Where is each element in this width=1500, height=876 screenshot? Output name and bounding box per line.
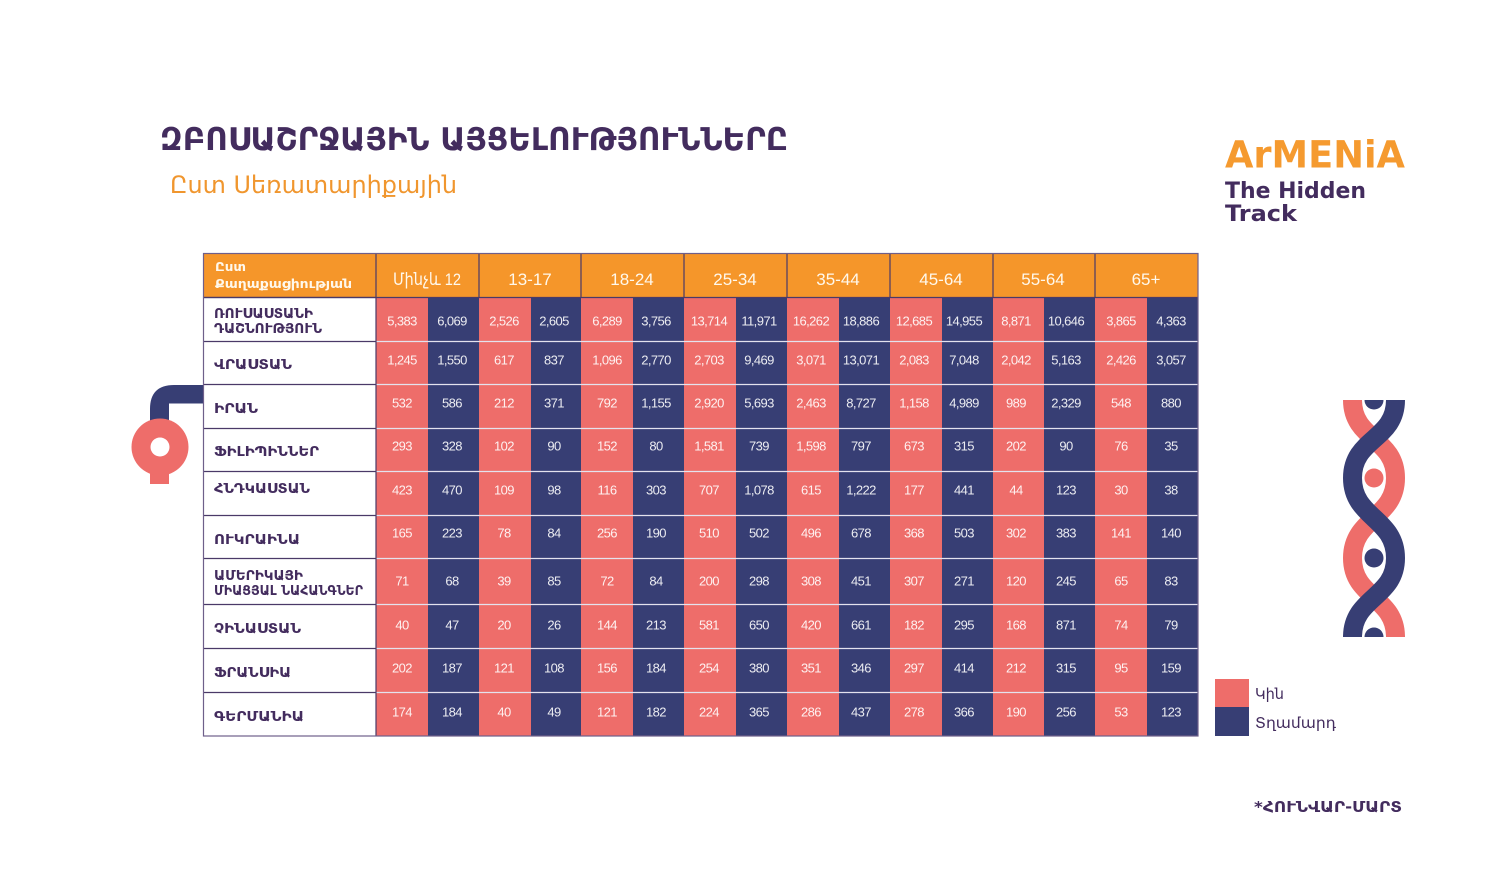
logo: Armenia The Hidden Track: Track (1225, 202, 1298, 227)
row: Georgia: 9,469 (744, 352, 774, 368)
row: Russian Federation: 11,971 (741, 314, 777, 328)
table header row: Ըստ (215, 260, 246, 274)
row: United States: ՄԻԱՑՅԱԼ ՆԱՀԱՆԳՆԵՐ (214, 583, 363, 599)
row: Germany: 366 (954, 704, 974, 720)
row: Philippines: 76 (1114, 438, 1128, 454)
row: Germany: 40 (497, 704, 511, 720)
row: India: 1,078 (744, 482, 774, 498)
title: ԶԲՈՍԱՇՐՋԱՅԻՆ ԱՅՑԵԼՈՒԹՅՈՒՆՆԵՐԸ (160, 122, 788, 158)
row: Georgia: 617 (494, 352, 514, 368)
row: Georgia: 2,426 (1106, 352, 1136, 368)
row: Georgia: 3,057 (1156, 352, 1186, 368)
row: France: 95 (1114, 660, 1128, 676)
row: China (214, 618, 1178, 637)
row: Iran: 880 (1161, 396, 1181, 410)
legend (1215, 679, 1336, 736)
row: Russian Federation: 2,526 (489, 314, 519, 328)
row: Ukraine: 84 (547, 526, 561, 540)
row: Philippines (214, 438, 1178, 460)
row: United States: 307 (904, 574, 924, 588)
row: Iran: 2,463 (796, 396, 826, 410)
row: United States: 120 (1006, 574, 1026, 588)
row: India: 98 (547, 482, 561, 498)
row: Georgia (214, 352, 1186, 373)
row: India: 615 (801, 482, 821, 498)
row: Philippines: 202 (1006, 438, 1026, 454)
row: France: 187 (442, 660, 462, 676)
row: Georgia: 13,071 (843, 352, 879, 368)
row: Iran: 989 (1006, 396, 1026, 410)
row: Iran: 548 (1111, 396, 1131, 410)
row: Georgia: 2,703 (694, 352, 724, 368)
row: United States: 245 (1056, 574, 1076, 588)
row: Russian Federation: 6,069 (437, 314, 467, 328)
row: India: 44 (1009, 482, 1023, 498)
row: Russian Federation: 10,646 (1048, 314, 1084, 328)
row: Iran: 2,329 (1051, 396, 1081, 410)
table header row: 35-44 (816, 270, 860, 289)
female and male data columns (376, 297, 1198, 736)
row: Russian Federation: ՌՈՒՍԱՍՏԱՆԻ (214, 306, 313, 322)
row: France: 380 (749, 660, 769, 676)
row: India (214, 481, 1178, 498)
row: Russian Federation: ԴԱՇՆՈՒԹՅՈՒՆ (214, 321, 322, 337)
legend: Տղամարդ (1255, 714, 1336, 732)
row: India: 116 (598, 482, 617, 498)
row: United States: 85 (547, 574, 561, 588)
row: China: 40 (395, 618, 409, 632)
row: Germany: 256 (1056, 704, 1076, 720)
row: Ukraine: 140 (1161, 526, 1181, 540)
row: France: 121 (494, 660, 514, 676)
logo: Armenia The Hidden Track: ArMENiA (1225, 134, 1405, 176)
row: India: 177 (904, 482, 924, 498)
row: India: 109 (494, 482, 514, 498)
table header row: 45-64 (919, 270, 963, 289)
legend: Կին (1255, 685, 1284, 703)
row: United States: 71 (395, 574, 409, 588)
table header row: 65+ (1132, 270, 1160, 289)
row: Russian Federation (214, 306, 1186, 337)
row: United States: 84 (649, 574, 663, 588)
row: Russian Federation: 13,714 (691, 314, 727, 328)
row: China: ՉԻՆԱՍՏԱՆ (214, 621, 301, 637)
row: Germany: 123 (1161, 704, 1181, 720)
row: Ukraine: 510 (699, 526, 719, 540)
row: India: 303 (646, 482, 666, 498)
row: Iran: ԻՐԱՆ (214, 401, 258, 417)
row: India: 123 (1056, 482, 1076, 498)
data table (203, 253, 1198, 736)
row: Germany: 190 (1006, 704, 1026, 720)
row: Iran: 792 (597, 396, 617, 410)
row: India: 38 (1164, 482, 1178, 498)
row: Georgia: 1,245 (387, 352, 417, 368)
row: Germany: 437 (851, 704, 871, 720)
row: Russian Federation: 18,886 (843, 314, 879, 328)
row: China: 74 (1114, 618, 1128, 632)
row: Iran: 1,155 (641, 396, 671, 410)
row: India: 423 (392, 482, 412, 498)
row: Ukraine: 383 (1056, 526, 1076, 540)
row: Georgia: 3,071 (796, 352, 826, 368)
row: China: 168 (1006, 618, 1026, 632)
row: Ukraine: 502 (749, 526, 769, 540)
row: India: 470 (442, 482, 462, 498)
row: Germany: 286 (801, 704, 821, 720)
row: Iran: 1,158 (899, 396, 929, 410)
row: India: 441 (954, 482, 974, 498)
row: Philippines: ՖԻԼԻՊԻՆՆԵՐ (214, 444, 319, 460)
row: United States: ԱՄԵՐԻԿԱՅԻ (214, 568, 303, 584)
row: France: 315 (1056, 660, 1076, 676)
row: China: 79 (1164, 618, 1178, 632)
row: Russian Federation: 2,605 (539, 314, 569, 328)
row: Germany: 53 (1114, 704, 1128, 720)
row: France: ՖՐԱՆՍԻԱ (214, 665, 291, 681)
row: India: 30 (1114, 482, 1128, 498)
row: United States: 83 (1164, 574, 1178, 588)
row: China: 182 (904, 618, 924, 632)
table header row: 13-17 (508, 270, 552, 289)
row: Philippines: 90 (1059, 438, 1073, 454)
subtitle: Ըստ Սեռատարիքային (170, 171, 457, 199)
row: Germany (214, 704, 1181, 725)
row: Russian Federation: 6,289 (592, 314, 622, 328)
row: Philippines: 80 (649, 438, 663, 454)
row: France: 159 (1161, 660, 1181, 676)
row: Russian Federation: 3,756 (641, 314, 671, 328)
row: China: 144 (597, 618, 617, 632)
row: Germany: 365 (749, 704, 769, 720)
row: United States: 200 (699, 574, 719, 588)
row: Germany: 174 (392, 704, 412, 720)
row: Philippines: 90 (547, 438, 561, 454)
row: United States: 298 (749, 574, 769, 588)
row: China: 650 (749, 618, 769, 632)
row: France: 297 (904, 660, 924, 676)
row: Georgia: 1,550 (437, 352, 467, 368)
row: China: 295 (954, 618, 974, 632)
row: Ukraine: 165 (392, 526, 412, 540)
row: Germany: 121 (597, 704, 617, 720)
row: Ukraine: ՈՒԿՐԱԻՆԱ (214, 532, 300, 548)
row: Georgia: 2,083 (899, 352, 929, 368)
row: United States: 39 (497, 574, 511, 588)
table header row: Քաղաքացիության (215, 277, 352, 291)
row: France: 414 (954, 660, 974, 676)
row: Russian Federation: 12,685 (896, 314, 932, 328)
row: United States: 451 (851, 574, 871, 588)
table header row: 18-24 (610, 270, 654, 289)
row: Ukraine: 223 (442, 526, 462, 540)
row: Georgia: 2,042 (1001, 352, 1031, 368)
row: Russian Federation: 16,262 (793, 314, 829, 328)
table header row: 55-64 (1021, 270, 1065, 289)
row: Georgia: 2,770 (641, 352, 671, 368)
row: Russian Federation: 5,383 (387, 314, 417, 328)
row: India: 707 (699, 482, 719, 498)
row: United States: 65 (1114, 574, 1128, 588)
row: Ukraine: 678 (851, 526, 871, 540)
row: Russian Federation: 14,955 (946, 314, 982, 328)
row: Germany: ԳԵՐՄԱՆԻԱ (214, 709, 304, 725)
row: China: 20 (497, 618, 511, 632)
row: Philippines: 1,598 (796, 438, 826, 454)
row: Ukraine: 141 (1111, 526, 1131, 540)
row: United States: 72 (600, 574, 614, 588)
row: Georgia: ՎՐԱՍՏԱՆ (214, 357, 292, 373)
row: Iran: 212 (494, 396, 514, 410)
row: France: 254 (699, 660, 719, 676)
table header row (203, 253, 1198, 298)
row: China: 581 (699, 618, 719, 632)
row: Philippines: 102 (494, 438, 514, 454)
row: United States (214, 568, 1178, 599)
row: France (214, 660, 1181, 681)
row: Ukraine: 503 (954, 526, 974, 540)
row: Russian Federation: 8,871 (1001, 314, 1031, 328)
row: Iran: 4,989 (949, 396, 979, 410)
table header row: 25-34 (713, 270, 757, 289)
row: Iran: 586 (442, 396, 462, 410)
row: France: 184 (646, 660, 666, 676)
row: Ukraine: 190 (646, 526, 666, 540)
row: United States: 271 (954, 574, 974, 588)
row: Russian Federation: 3,865 (1106, 314, 1136, 328)
logo: Armenia The Hidden Track: The Hidden (1225, 179, 1366, 204)
row: Philippines: 739 (749, 438, 769, 454)
row: Philippines: 315 (954, 438, 974, 454)
row: Germany: 278 (904, 704, 924, 720)
row: Philippines: 328 (442, 438, 462, 454)
row: Iran: 371 (544, 396, 564, 410)
row: Ukraine: 78 (497, 526, 511, 540)
row: France: 202 (392, 660, 412, 676)
row: China: 661 (851, 618, 871, 632)
row: Iran: 2,920 (694, 396, 724, 410)
row: France: 351 (801, 660, 821, 676)
row: China: 26 (547, 618, 561, 632)
row: Ukraine: 496 (801, 526, 821, 540)
row: Philippines: 152 (597, 438, 617, 454)
icon: DNA helix (1352, 390, 1396, 646)
row: China: 420 (801, 618, 821, 632)
row: Philippines: 673 (904, 438, 924, 454)
row: China: 871 (1056, 618, 1076, 632)
row: Germany: 49 (547, 704, 561, 720)
row: France: 212 (1006, 660, 1026, 676)
row: United States: 68 (445, 574, 459, 588)
row: Iran: 8,727 (846, 396, 876, 410)
row: Georgia: 7,048 (949, 352, 979, 368)
row: Iran: 5,693 (744, 396, 774, 410)
row: Philippines: 1,581 (694, 438, 724, 454)
row: Ukraine: 256 (597, 526, 617, 540)
row: India: 1,222 (846, 482, 876, 498)
row: Georgia: 5,163 (1051, 352, 1081, 368)
logo: Armenia The Hidden Track (1225, 134, 1405, 227)
row: Philippines: 35 (1164, 438, 1178, 454)
row: Germany: 184 (442, 704, 462, 720)
row: Ukraine: 368 (904, 526, 924, 540)
row: Ukraine (214, 526, 1181, 548)
row: Ukraine: 302 (1006, 526, 1026, 540)
row: Iran (214, 396, 1181, 417)
row: China: 213 (646, 618, 666, 632)
footnote: *ՀՈՒՆՎԱՐ-ՄԱՐՏ (1254, 798, 1402, 816)
row: Georgia: 1,096 (592, 352, 622, 368)
row: India: ՀՆԴԿԱՍՏԱՆ (214, 481, 310, 497)
table header row: Մինչև 12 (393, 270, 461, 289)
row: Iran: 532 (392, 396, 412, 410)
row: Philippines: 293 (392, 438, 412, 454)
icon: pipe connector and ring (132, 385, 203, 484)
row: France: 346 (851, 660, 871, 676)
row: Germany: 182 (646, 704, 666, 720)
row: Germany: 224 (699, 704, 719, 720)
row: France: 108 (544, 660, 564, 676)
row: France: 156 (597, 660, 617, 676)
row: China: 47 (445, 618, 459, 632)
row: Philippines: 797 (851, 438, 871, 454)
row: Russian Federation: 4,363 (1156, 314, 1186, 328)
row: Georgia: 837 (544, 352, 564, 368)
row: United States: 308 (801, 574, 821, 588)
